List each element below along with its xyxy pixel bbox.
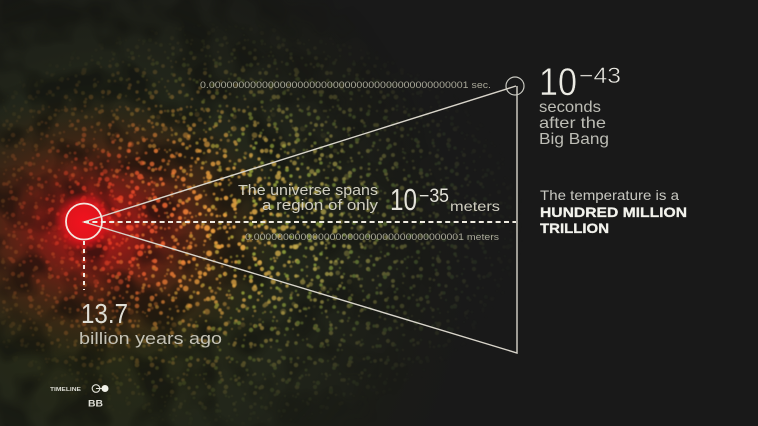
particle field — [0, 33, 500, 412]
dark mottling — [0, 13, 329, 426]
time caption — [539, 99, 609, 148]
timeline marker BB: BB — [88, 398, 103, 410]
red glow — [0, 0, 420, 426]
red core glow — [54, 192, 114, 252]
dashed span line — [84, 221, 516, 223]
temperature text — [540, 187, 687, 236]
timeline label: TIMELINE — [50, 387, 81, 393]
temperature text: The temperature is a — [540, 187, 679, 203]
temperature text: TRILLION — [540, 220, 609, 236]
cone diagram — [84, 86, 517, 353]
timeline icon — [92, 385, 108, 392]
time value 10^-43 — [539, 61, 621, 104]
span value 10^-35 meters: meters — [450, 199, 500, 214]
time caption: after the — [539, 115, 606, 132]
temperature text: HUNDRED MILLION — [540, 204, 687, 220]
small circle at cone tip — [506, 77, 524, 95]
span value 10^-35 meters: 10 — [390, 182, 417, 217]
time caption: seconds — [539, 99, 601, 116]
dashed time line — [83, 241, 85, 290]
span value 10^-35 meters: −35 — [419, 186, 449, 207]
time caption: Big Bang — [539, 131, 609, 148]
time value 10^-43: 10 — [539, 61, 577, 104]
origin circle — [66, 204, 102, 240]
span caption: The universe spans — [238, 182, 378, 199]
span value 10^-35 meters — [390, 182, 500, 217]
long decimal: meters: 0.000000000000000000000000000000000001 meters — [245, 232, 500, 242]
span caption: a region of only — [262, 197, 379, 214]
age value: 13.7 — [81, 298, 128, 329]
dense particle core — [46, 112, 380, 333]
time value 10^-43: −43 — [579, 63, 621, 88]
span caption — [238, 182, 379, 214]
long decimal: seconds: 0.00000000000000000000000000000000000000000001 sec. — [200, 80, 491, 90]
age caption: billion years ago — [79, 329, 222, 348]
